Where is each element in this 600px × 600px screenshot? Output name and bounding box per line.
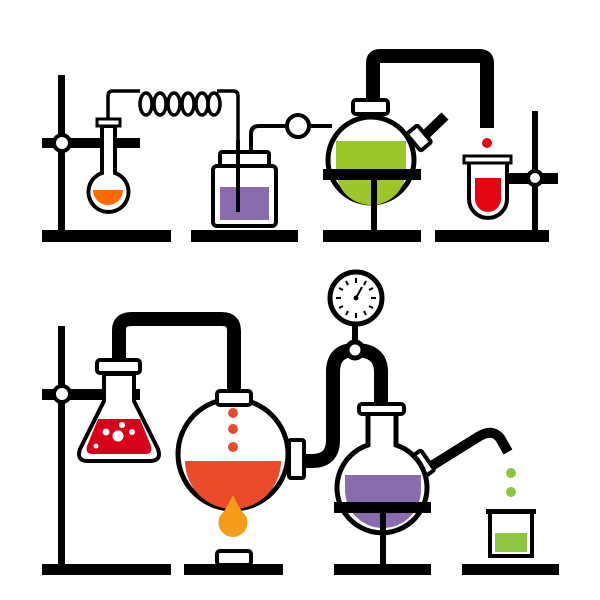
tube with valve [251,115,332,152]
test tube red with stand [464,111,558,233]
coil condenser tube [108,91,238,212]
top row [42,56,558,242]
base bars top [42,230,549,242]
jar purple [213,140,276,226]
base bars bottom [42,564,559,575]
beaker green [486,509,536,556]
pressure gauge [330,272,382,358]
erlenmeyer red [79,360,159,461]
flask 1 orange [88,119,129,212]
round flask green with stand [323,56,487,232]
round flask purple with stand [334,404,435,566]
side tube to beaker [425,433,508,470]
stand with clamp [42,326,140,566]
round flask orange [178,391,304,509]
red drop [482,138,492,148]
thick tube top-left [119,319,234,392]
bottom row [42,272,559,575]
gauge tubes [300,350,381,461]
stand 1 with clamp [42,75,140,235]
flame [218,495,248,537]
green drops [506,468,516,497]
burner [217,551,251,565]
